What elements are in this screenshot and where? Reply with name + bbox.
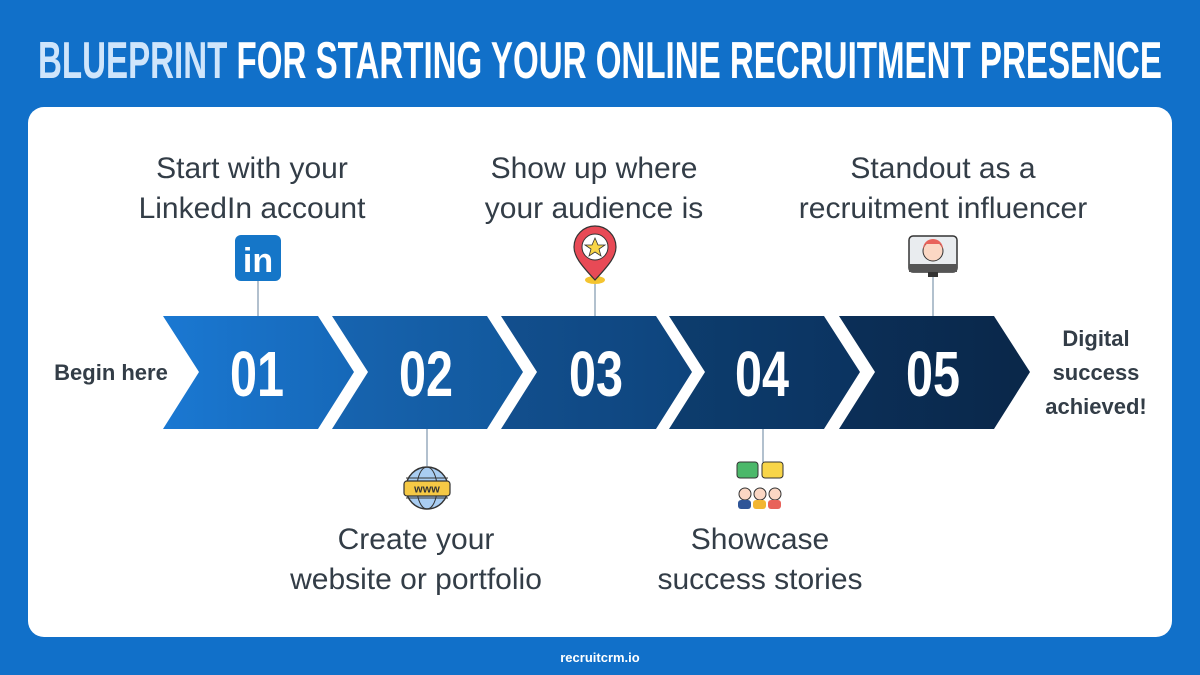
step 3 text: your audience is (485, 192, 703, 225)
chevron 04: 04 (735, 338, 789, 410)
connector lines (258, 270, 933, 466)
step 4 text (657, 523, 863, 596)
footer: recruitcrm.io: recruitcrm.io (560, 650, 640, 665)
step 2 text: Create your (338, 523, 494, 556)
text: digital success achieved: achieved! (1045, 394, 1147, 419)
chevron 03: 03 (569, 338, 623, 410)
step 4 text: success stories (657, 563, 863, 596)
icon: globe www: www (413, 484, 440, 496)
step 4 text: Showcase (691, 523, 829, 556)
icon: monitor influencer (909, 236, 957, 277)
step 3 text (485, 152, 703, 225)
step 5 text: recruitment influencer (799, 192, 1087, 225)
step 2 text (289, 523, 542, 596)
step 5 text: Standout as a (850, 152, 1036, 185)
icon: success stories people (737, 462, 783, 509)
chevron 04 (669, 316, 860, 429)
step 3 text: Show up where (491, 152, 697, 185)
icon: linkedin (235, 235, 281, 281)
text: digital success achieved (1045, 326, 1147, 419)
icon: location star (574, 226, 616, 284)
chevron 01 (163, 316, 354, 429)
chevron 05 (839, 316, 1030, 429)
step 1 text: LinkedIn account (139, 192, 366, 225)
chevron 05: 05 (906, 338, 960, 410)
icon: globe www (404, 467, 450, 509)
chevron 01: 01 (230, 338, 284, 410)
text: begin here: Begin here (54, 360, 168, 385)
step 1 text: Start with your (156, 152, 348, 185)
step 1 text (139, 152, 366, 225)
step 5 text (799, 152, 1087, 225)
chevron 02: 02 (399, 338, 453, 410)
text: digital success achieved: Digital (1062, 326, 1130, 351)
icon: linkedin: in (243, 242, 273, 280)
panel: white card (28, 107, 1172, 637)
chevron 03 (501, 316, 692, 429)
step 2 text: website or portfolio (289, 563, 542, 596)
text: digital success achieved: success (1053, 360, 1139, 385)
chevron 02 (332, 316, 523, 429)
